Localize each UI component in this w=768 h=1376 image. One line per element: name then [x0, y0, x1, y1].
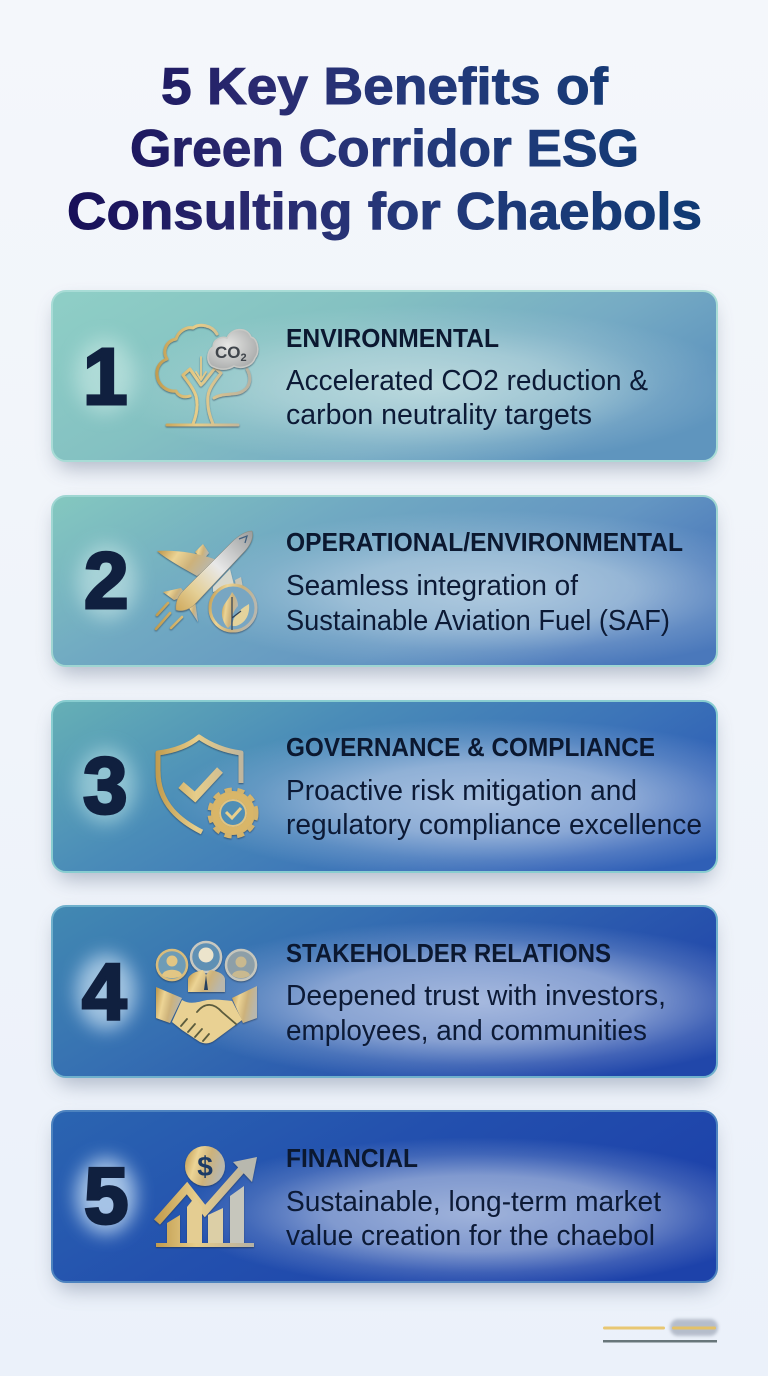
description: carbon neutrality targets [286, 399, 592, 431]
description [286, 980, 666, 1047]
icon: CO2 cloud: CO [215, 343, 240, 362]
icon: financial growth chart [156, 1146, 257, 1247]
panel: operational/environmental [52, 496, 717, 674]
icon: CO2 cloud [208, 330, 258, 369]
description: Deepened trust with investors, [286, 980, 666, 1012]
icon: tree with CO2 cloud [157, 325, 250, 425]
description: Accelerated CO2 reduction & [286, 365, 648, 397]
description: Sustainable Aviation Fuel (SAF) [286, 605, 670, 637]
heading: OPERATIONAL/ENVIRONMENTAL [286, 527, 683, 557]
heading: GOVERNANCE & COMPLIANCE [286, 732, 655, 762]
description [286, 1186, 661, 1252]
description: Proactive risk mitigation and [286, 775, 637, 807]
title [67, 58, 702, 241]
heading: ENVIRONMENTAL [286, 323, 499, 353]
title: 5 Key Benefits of [161, 58, 609, 116]
title: Green Corridor ESG [130, 120, 639, 178]
heading: STAKEHOLDER RELATIONS [286, 938, 611, 968]
description: value creation for the chaebol [286, 1220, 655, 1252]
panel: governance and compliance [52, 701, 717, 880]
description [286, 570, 670, 637]
description [286, 775, 702, 841]
icon: shield with gear [158, 737, 256, 836]
number 1: 1 [83, 332, 128, 421]
number 2: 2 [84, 536, 128, 625]
panel: environmental [52, 291, 717, 469]
description [286, 365, 648, 431]
description: Seamless integration of [286, 570, 578, 602]
description: regulatory compliance excellence [286, 809, 702, 841]
title: Consulting for Chaebols [67, 183, 702, 241]
number 5: 5 [84, 1151, 128, 1240]
panel: financial [52, 1111, 717, 1290]
description: Sustainable, long-term market [286, 1186, 661, 1218]
description: employees, and communities [286, 1015, 647, 1047]
icon: plane with leaf badge [156, 531, 256, 631]
icon: financial growth chart: $ [197, 1151, 213, 1182]
heading: FINANCIAL [286, 1143, 418, 1173]
number 4: 4 [82, 947, 127, 1036]
panel: stakeholder relations [52, 906, 717, 1085]
icon: CO2 cloud: 2 [240, 352, 247, 364]
number 3: 3 [83, 741, 128, 830]
footer accent lines [603, 1319, 718, 1342]
icon: stakeholders handshake [156, 942, 257, 1043]
